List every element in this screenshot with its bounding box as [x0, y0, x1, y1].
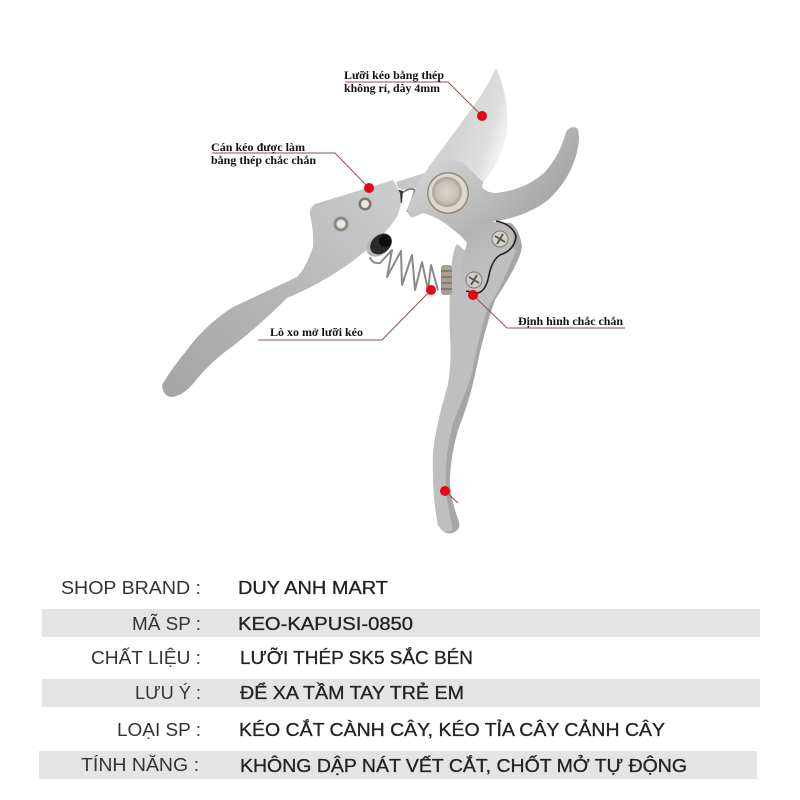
callout: shape — [468, 290, 625, 328]
spring end seat — [441, 265, 452, 295]
row: material — [91, 647, 473, 668]
black spring bushing — [362, 228, 396, 262]
row: features — [39, 751, 757, 779]
callout: shape: Định hình chắc chắn — [518, 314, 623, 328]
pivot bolt — [427, 172, 469, 214]
callout: spring — [258, 285, 436, 340]
plate dark outline groove — [466, 221, 516, 293]
row: note: LƯU Ý : — [135, 683, 201, 703]
back link arm — [396, 172, 428, 190]
row: product type: KÉO CẮT CÀNH CÂY, KÉO TỈA CÂY CẢNH CÂY — [239, 719, 665, 740]
link wire loop — [402, 189, 415, 212]
left handle rivets — [334, 198, 372, 232]
left handle — [162, 180, 401, 397]
row: features: KHÔNG DẬP NÁT VẾT CẮT, CHỐT MỞ TỰ ĐỘNG — [240, 755, 687, 776]
row: product code — [42, 609, 760, 637]
callout: handle: Cán kéo được làm — [211, 140, 305, 154]
spring — [370, 250, 438, 290]
link arm dark stub — [396, 189, 403, 203]
upper blade polished face — [438, 68, 507, 182]
lower screw — [466, 272, 482, 288]
row: product code: KEO-KAPUSI-0850 — [238, 614, 413, 634]
upper cutting blade and pivot plate — [407, 68, 514, 293]
row: shop brand: SHOP BRAND : — [61, 578, 201, 598]
lower hooked blade — [482, 127, 579, 222]
row: shop brand — [61, 578, 388, 598]
row: product code: MÃ SP : — [132, 613, 201, 634]
row: features: TÍNH NĂNG : — [81, 755, 199, 775]
row: material: CHẤT LIỆU : — [91, 647, 201, 668]
callout: handle: bằng thép chắc chắn — [211, 153, 316, 167]
callout: handle — [211, 140, 374, 193]
callout: blade — [344, 68, 487, 121]
callout: spring: Lò xo mở lưỡi kéo — [270, 325, 363, 339]
callout: blade: Lưỡi kéo bằng thép — [344, 68, 444, 82]
row: shop brand: DUY ANH MART — [238, 578, 388, 598]
pruning shears illustration — [162, 68, 579, 533]
callout: blade: không rỉ, dày 4mm — [344, 81, 440, 95]
row: note: ĐỂ XA TẦM TAY TRẺ EM — [240, 682, 464, 703]
row: material: LƯỠI THÉP SK5 SẮC BÉN — [240, 647, 473, 668]
right handle body — [433, 222, 522, 533]
spec table — [39, 578, 760, 779]
row: product type: LOẠI SP : — [117, 720, 201, 740]
upper screw — [492, 231, 508, 247]
right handle light face — [433, 240, 516, 532]
row: product type — [117, 719, 665, 740]
row: note — [42, 679, 760, 707]
marker: handle tip — [440, 486, 458, 503]
